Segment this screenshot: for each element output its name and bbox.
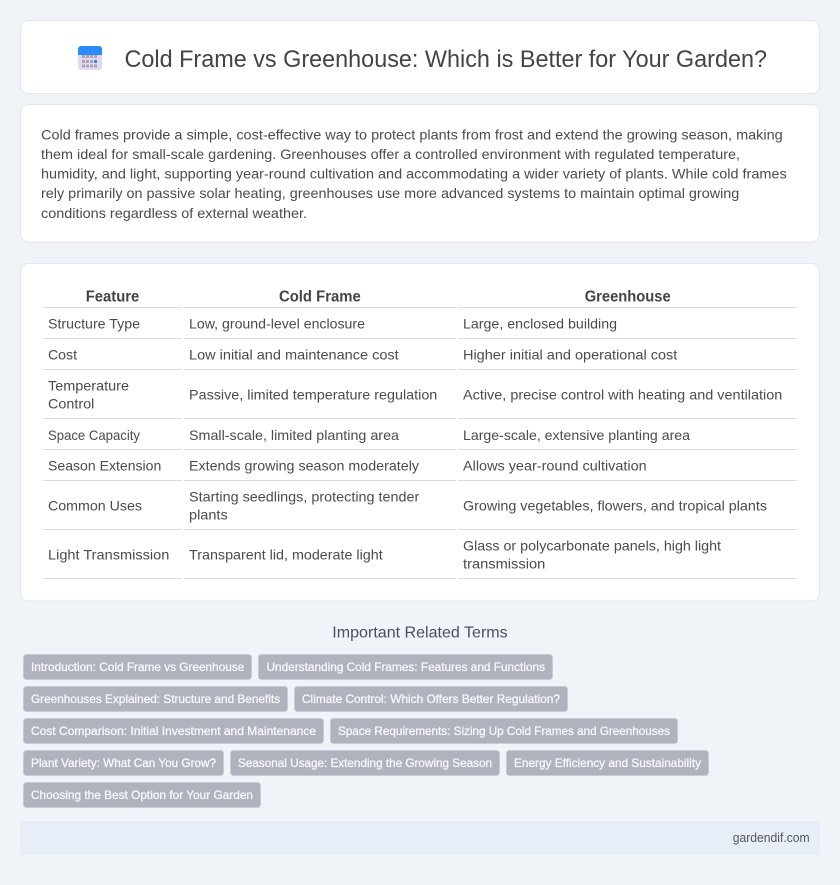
icon: calendar [78,46,102,70]
table row: space capacity: Small-scale, limited planting area [189,427,399,443]
panel: introduction [20,104,820,242]
table row: space capacity: Large-scale, extensive planting area [463,427,690,443]
panel: comparison table [20,264,820,601]
tag: climate control [294,686,568,712]
table row: cost: Cost [48,346,77,362]
table header row: Feature [86,289,139,306]
table row: structure type: Large, enclosed building [463,316,617,332]
table row: light transmission: transmission [463,556,545,572]
table row: common uses: Starting seedlings, protecting tender [189,489,420,505]
heading: important related terms: Important Related Terms [332,624,508,641]
tag: choosing the best option: Choosing the Best Option for Your Garden [31,788,253,802]
text block: introduction paragraph: them ideal for small-scale gardening. Greenhouses offer a controlled environment with regulated temperature, [41,146,740,162]
table row: cost [43,346,797,370]
panel: header [20,20,820,94]
tag: space requirements [330,718,678,744]
tag: cost comparison [24,718,324,744]
text block: introduction paragraph: humidity, and light, supporting year-round cultivation and accommodating a wider variety of plants. While cold frames [41,166,787,182]
tag: cost comparison: Cost Comparison: Initial Investment and Maintenance [31,724,316,738]
text block: introduction paragraph: rely primarily on passive solar heating, greenhouses use more advanced systems to maintain optimal growing [41,185,739,201]
table row: light transmission: Light Transmission [48,546,169,562]
tag: plant variety: Plant Variety: What Can You Grow? [31,756,216,770]
table row: temperature control: Active, precise control with heating and ventilation [463,386,782,402]
text block: introduction paragraph: Cold frames provide a simple, cost-effective way to protect plants from frost and extend the growing season, making [41,126,783,142]
text block: introduction paragraph: conditions regardless of external weather. [41,205,307,221]
tag: greenhouses explained: Greenhouses Explained: Structure and Benefits [31,692,280,706]
text block: introduction paragraph [41,126,787,221]
table row: space capacity: Space Capacity [48,427,140,443]
footer bar [20,821,820,855]
tag: space requirements: Space Requirements: Sizing Up Cold Frames and Greenhouses [338,724,670,738]
table row: temperature control: Control [48,396,94,412]
table row: season extension: Season Extension [48,458,161,474]
tag: energy efficiency: Energy Efficiency and Sustainability [514,756,701,770]
panel: related term tags [24,654,708,808]
tag: plant variety [24,750,224,776]
table row: common uses: Growing vegetables, flowers, and tropical plants [463,498,767,514]
table row: season extension: Allows year-round cultivation [463,458,647,474]
table row: structure type: Structure Type [48,316,140,332]
table header row: Greenhouse [585,289,671,306]
table row: light transmission: Transparent lid, moderate light [189,546,383,562]
tag: energy efficiency [506,750,708,776]
table row: season extension: Extends growing season moderately [189,458,419,474]
table row: cost: Low initial and maintenance cost [189,346,399,362]
table row: common uses [43,489,797,530]
tag: seasonal usage [230,750,500,776]
table header row: Cold Frame [279,289,361,306]
table row: space capacity [43,427,797,450]
table row: structure type [43,316,797,339]
table row: temperature control: Passive, limited temperature regulation [189,386,437,402]
tag: seasonal usage: Seasonal Usage: Extending the Growing Season [238,756,492,770]
table row: season extension [43,458,797,481]
tag: climate control: Climate Control: Which Offers Better Regulation? [302,692,560,706]
tag: understanding cold frames [258,654,552,680]
title: Cold Frame vs Greenhouse: Which is Better for Your Garden? [124,46,767,73]
table row: light transmission: Glass or polycarbonate panels, high light [463,538,721,554]
table header row [43,289,797,308]
tag: understanding cold frames: Understanding Cold Frames: Features and Functions [266,660,545,674]
table row: common uses: plants [189,507,228,523]
tag: greenhouses explained [24,686,288,712]
tag: introduction: Introduction: Cold Frame vs Greenhouse [31,660,245,674]
table row: structure type: Low, ground-level enclosure [189,316,365,332]
table row: temperature control: Temperature [48,378,129,394]
tag: introduction [24,654,252,680]
table row: light transmission [43,538,797,579]
footer source text: gardendif.com [733,830,810,845]
table row: temperature control [43,378,797,419]
tag: choosing the best option [24,782,260,808]
table row: cost: Higher initial and operational cost [463,346,677,362]
table row: common uses: Common Uses [48,498,142,514]
